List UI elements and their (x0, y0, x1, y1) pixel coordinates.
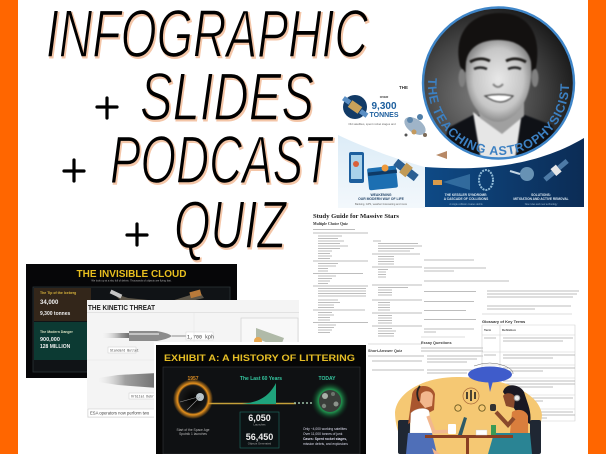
slide: the kinetic threat (87, 300, 299, 418)
curved badge text: THE TEACHING ASTROPHYSICIST (428, 78, 569, 156)
smile (485, 94, 513, 102)
era label: the last 60 years: The Last 60 Years (240, 376, 282, 382)
caption: the Kessler syndrome: THE KESSLER SYNDROME: (445, 193, 487, 197)
table: glossary of key terms: Term (484, 328, 491, 332)
era label: today: TODAY (319, 376, 336, 382)
caption: the Kessler syndrome: A CASCADE OF COLLISIONS (444, 197, 488, 201)
table: glossary of key terms (482, 319, 575, 421)
rocket image (116, 294, 204, 300)
stat: 9,300 tonnes: TONNES (369, 112, 399, 119)
era label 1957: 1957 (187, 376, 199, 382)
slide title: THE KINETIC THREAT (88, 305, 156, 312)
speech bubble (468, 363, 513, 392)
slide: the invisible cloud (26, 264, 237, 378)
bullet (102, 331, 172, 341)
panel: the modern danger (34, 322, 91, 360)
stat box: launches and objects (240, 412, 279, 448)
face (466, 40, 531, 122)
shirt (473, 112, 522, 160)
light wave background (338, 135, 425, 208)
caption: the Kessler syndrome: A single collision creates debris (449, 203, 483, 206)
heading: short answer: Short-Answer Quiz (368, 349, 402, 353)
stat: 9,300 tonnes (369, 95, 399, 119)
panel: the modern danger: The Modern Danger (40, 330, 74, 334)
portrait photo (424, 8, 573, 158)
panel: top-right infographic thumbnail (338, 85, 584, 208)
suit (446, 114, 554, 156)
table: glossary of key terms: Definition (502, 328, 516, 332)
icon: satellite (392, 157, 420, 183)
stat box: launches and objects: 56,450 (246, 432, 273, 442)
chart: launches growth (242, 383, 276, 404)
table: glossary of key terms: Glossary of Key Terms (482, 319, 526, 324)
title lettering (46, 0, 369, 263)
debris streak (104, 373, 154, 388)
panel: tip of the iceberg: The Tip of the Iceberg (40, 291, 76, 295)
stat text: today: Only ~4,000 working satellites (303, 427, 347, 431)
caption: weakening our way of life: OUR MODERN WAY OF LIFE (358, 197, 405, 201)
panel: the modern danger: 900,000 (40, 337, 60, 343)
inner frame (163, 367, 360, 454)
icon: phone (349, 152, 364, 183)
heading fragment: THE (399, 85, 408, 90)
title shadow layer: QUIZ (175, 188, 289, 264)
column: quiz questions middle (372, 241, 422, 336)
eyebrows and eyes (470, 59, 526, 62)
panel: the modern danger: 128 MILLION (40, 344, 71, 350)
stat box: launches and objects: Launches (253, 422, 266, 426)
heading: essay questions: Essay Questions (421, 341, 452, 345)
neck (478, 103, 525, 134)
caption: solutions (513, 193, 569, 206)
section heading: multiple choice: Multiple Choice Quiz (313, 222, 348, 226)
navy panel (425, 138, 584, 207)
illustration: podcast hosts (395, 377, 542, 454)
portrait badge: The Teaching Astrophysicist (422, 6, 576, 160)
title: Infographic + Slides + Podcast + Quiz (46, 0, 370, 264)
hair (458, 13, 537, 72)
line: PODCAST: PODCAST (110, 122, 334, 198)
icon: sputnik (173, 379, 213, 419)
chairs (398, 420, 410, 454)
column: quiz questions left (313, 230, 368, 332)
plus signs (64, 98, 147, 245)
caption: weakening our way of life: Banking, GPS, weather forecasting and more (355, 202, 408, 206)
debris label: Orbital Debris (131, 394, 158, 398)
speed label: 1,700 kph (187, 334, 214, 340)
icon: satellite globe (342, 95, 368, 119)
badge ring (423, 8, 574, 158)
column: short answers (424, 260, 579, 332)
left orange border (0, 0, 18, 454)
dark frame (33, 287, 230, 372)
bullet label: Standard Bullet (110, 348, 139, 352)
debris cluster (294, 382, 349, 420)
document: study guide (313, 213, 579, 421)
speed label (172, 332, 214, 340)
title shadow layer: SLIDES (141, 60, 315, 136)
bullet label (108, 347, 139, 353)
caption: start of space age: Start of the Space Age (176, 428, 210, 432)
caption: weakening our way of life (355, 193, 408, 206)
left host (406, 386, 453, 454)
caption: start of space age: Sputnik 1 launches (179, 432, 207, 436)
stat box: launches and objects: Objects Generated (248, 442, 272, 446)
icon: credit card (367, 165, 398, 190)
side panel (241, 318, 298, 358)
right host (488, 385, 532, 454)
line: SLIDES: SLIDES (140, 59, 314, 135)
caption: solutions: MITIGATION AND ACTIVE REMOVAL (513, 197, 569, 201)
stat text: today: Over 11,000 tonnes of junk (303, 432, 343, 436)
debris label (129, 393, 159, 399)
panel: tip of the iceberg (34, 288, 91, 321)
stat caption: Old satellites, spent rocket stages and (348, 122, 396, 126)
panel: tip of the iceberg: 34,000 (40, 300, 59, 306)
panel: tip of the iceberg: 9,300 tonnes (40, 311, 71, 317)
table (425, 435, 513, 438)
line: QUIZ: QUIZ (174, 187, 288, 263)
stat box: launches and objects: 6,050 (248, 413, 271, 423)
stat: 9,300 tonnes: OVER (380, 95, 389, 99)
caption: start of space age (176, 428, 210, 436)
slide title: EXHIBIT A: A HISTORY OF LITTERING (164, 353, 355, 364)
stat text: today: Cases: Spent rocket stages, (303, 437, 347, 441)
diagram: net and satellite (510, 158, 570, 183)
icon: debris streak (436, 151, 447, 159)
footer note (88, 409, 168, 417)
title shadow layer (47, 0, 370, 264)
stat text: today (303, 427, 348, 446)
footer note: ESA operators now perform two (90, 410, 150, 416)
slide subtitle: We look up at a sky full of debris. Thousands of objects are flying fast. (91, 278, 172, 282)
document heading: Study Guide for Massive Stars (313, 213, 399, 220)
yellow circle (395, 377, 542, 454)
caption: solutions: SOLUTIONS: (531, 193, 551, 197)
slide title: THE INVISIBLE CLOUD (76, 269, 186, 280)
icon: debris cloud (401, 113, 429, 139)
laptop and drink (458, 417, 467, 435)
caption: the Kessler syndrome (444, 193, 488, 206)
ears (458, 69, 466, 87)
title shadow layer: PODCAST (111, 123, 335, 199)
reaction icons (455, 405, 461, 411)
caption: solutions: New rules and new technology (525, 203, 558, 206)
timeline line (207, 402, 296, 404)
diagram: Kessler cascade (433, 170, 493, 190)
nose (493, 84, 503, 87)
slide: exhibit A, a history of littering (154, 342, 368, 454)
right orange border (588, 0, 606, 454)
caption: weakening our way of life: WEAKENING (370, 193, 392, 197)
icon: microphone badge (463, 388, 479, 404)
stat text: today: mission debris, and explosions (303, 442, 348, 446)
stat: 9,300 tonnes: 9,300 (371, 101, 397, 112)
